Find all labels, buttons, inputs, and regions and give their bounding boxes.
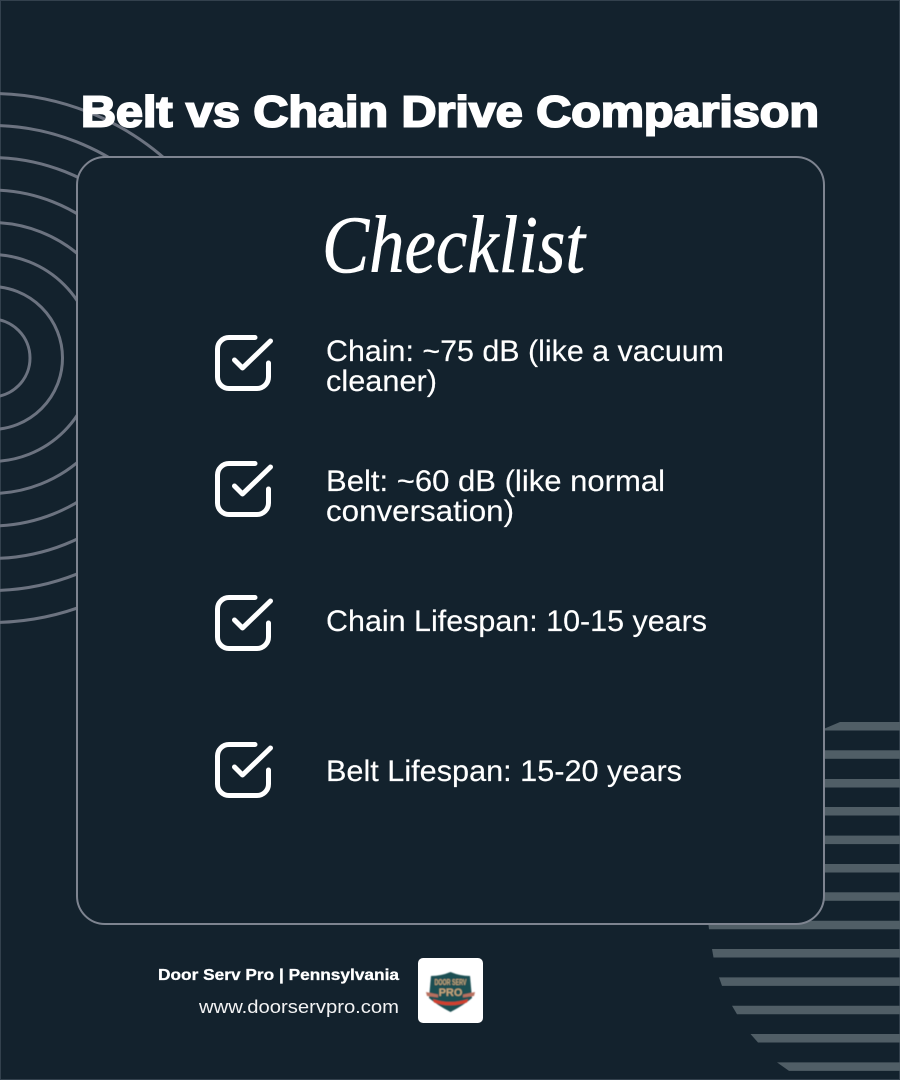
panel: checklist card: [77, 157, 824, 924]
text: chain decibels: Chain: ~75 dB (like a vacuum: [326, 335, 724, 368]
background: striped half circle: [708, 722, 900, 1071]
text: chain decibels: cleaner): [326, 365, 437, 398]
icon: checkbox: [218, 338, 270, 388]
icon: checkbox: [218, 598, 270, 648]
text: chain lifespan: Chain Lifespan: 10-15 years: [326, 605, 707, 638]
text: belt decibels: conversation): [326, 495, 514, 528]
logo: Door Serv Pro badge: PRO: [439, 987, 463, 999]
background: concentric arcs: [0, 94, 256, 622]
heading: Checklist: Checklist: [322, 199, 587, 290]
logo: Door Serv Pro badge: DOOR SERV: [434, 978, 467, 987]
icon: checkbox: [218, 464, 270, 514]
footer: website: www.doorservpro.com: [198, 997, 399, 1017]
text: belt decibels: [326, 465, 665, 528]
text: belt decibels: Belt: ~60 dB (like normal: [326, 465, 665, 498]
title: Belt vs Chain Drive Comparison: [81, 88, 819, 136]
text: chain decibels: [326, 335, 724, 398]
checklist item: chain lifespan: [218, 598, 707, 648]
footer: company name: Door Serv Pro | Pennsylvania: [158, 967, 399, 984]
text: belt lifespan: Belt Lifespan: 15-20 years: [326, 755, 682, 788]
icon: checkbox: [218, 744, 270, 796]
checklist item: belt noise: [218, 464, 665, 528]
checklist item: chain noise: [218, 335, 724, 398]
checklist item: belt lifespan: [218, 744, 682, 796]
logo: Door Serv Pro badge: [418, 958, 483, 1023]
